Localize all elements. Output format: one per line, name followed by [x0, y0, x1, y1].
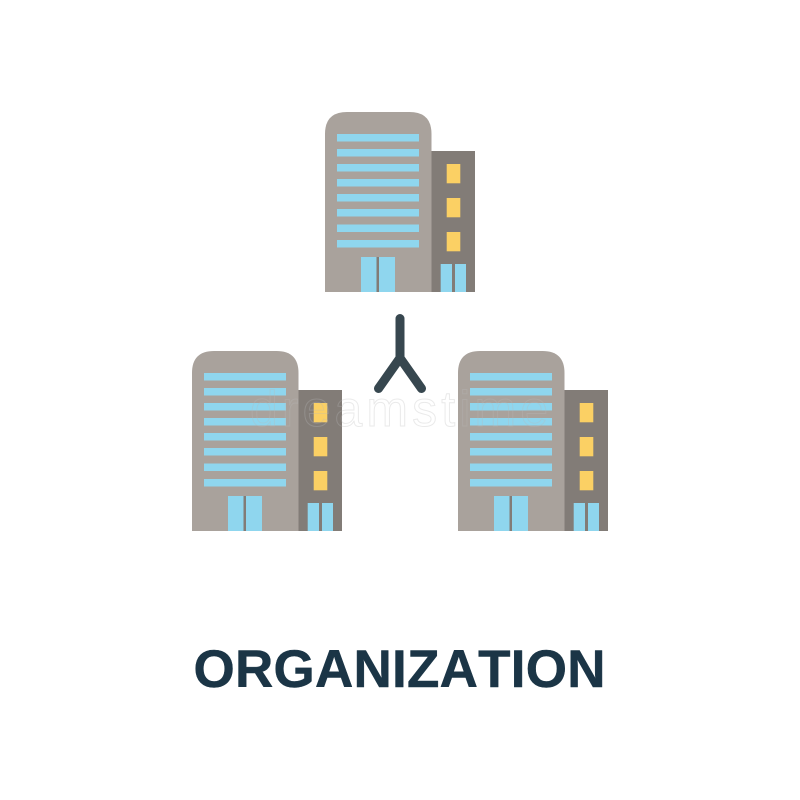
- icon: branching connector: [378, 318, 422, 388]
- icon: bottom right building: [458, 351, 608, 531]
- watermark: dreamstime: [250, 381, 548, 437]
- title: ORGANIZATION: [194, 640, 606, 699]
- icon: top building: [325, 112, 475, 292]
- icon: bottom left building: [192, 351, 342, 531]
